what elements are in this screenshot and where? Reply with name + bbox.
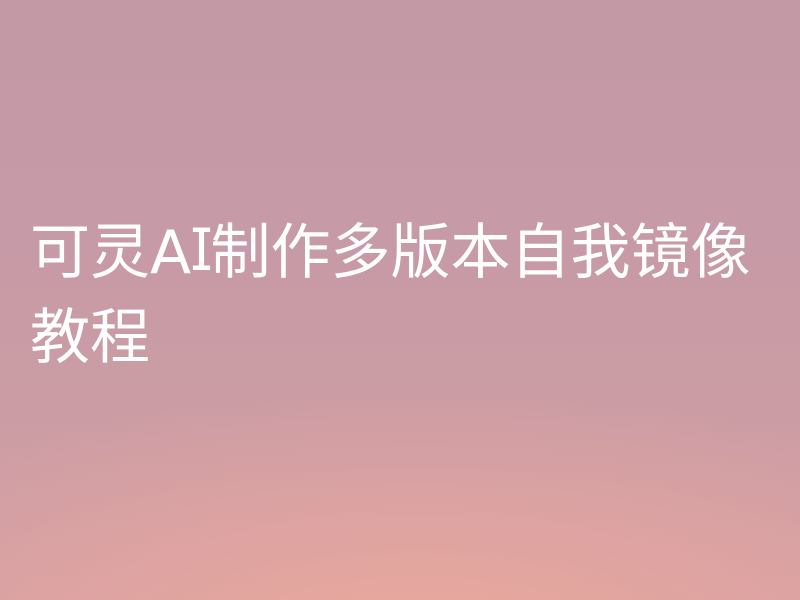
title xyxy=(30,204,751,376)
title: 教程 xyxy=(30,289,150,376)
title: 可灵AI制作多版本自我镜像 xyxy=(30,204,751,291)
